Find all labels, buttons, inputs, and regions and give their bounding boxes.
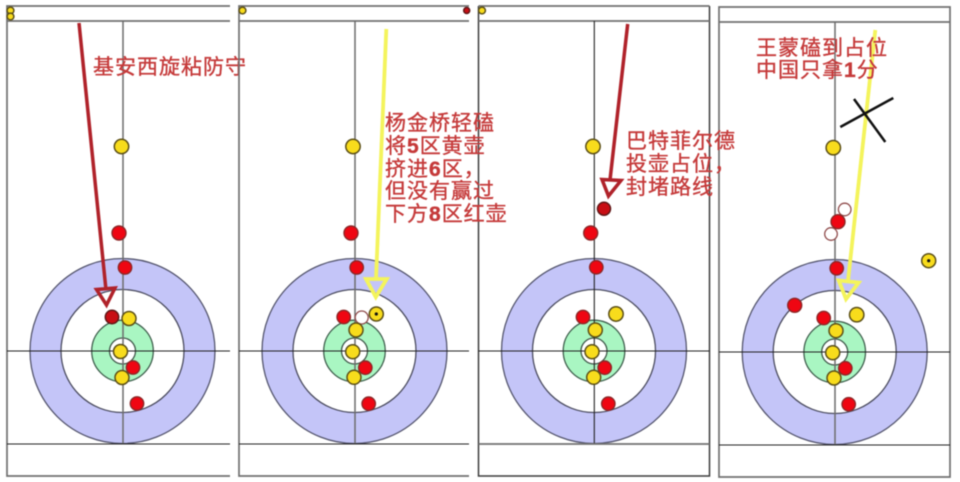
text: shot 3 caption: 封堵路线 [626,176,714,199]
text: shot 3 caption [626,130,736,199]
sheet frame [719,7,950,477]
panel: shot 2 [239,6,470,476]
text: shot 4 caption: 王蒙磕到占位 [756,37,888,60]
centre line [122,21,124,444]
text: shot 1 caption: 基安西旋粘防守 [93,56,247,79]
top rail and hog line [478,6,710,21]
stones [7,7,144,410]
text: shot 2 caption [385,112,508,226]
sheet frame [239,6,469,476]
centre line [354,21,356,444]
text: shot 2 caption: 将5区黄壶 [385,135,486,158]
text: shot 2 caption: 但没有赢过 [385,180,495,203]
text: shot 3 caption: 巴特菲尔德 [626,130,736,153]
panel: shot 4 [719,7,950,477]
stones [479,7,623,410]
sheet frame [7,6,230,476]
panel: shot 3 [478,6,710,476]
cross lines [719,352,950,445]
arrow: red throw [602,24,628,196]
text: shot 2 caption: 杨金桥轻磕 [385,112,495,135]
tee back line [478,443,710,445]
centre line [834,22,836,445]
cross lines [7,351,230,444]
text: shot 2 caption: 挤进6区， [385,158,486,181]
text: shot 4 caption: 中国只拿1分 [756,58,879,82]
house rings [262,258,447,444]
sheet frame [478,6,710,476]
icon: black cross [840,98,893,142]
house rings [502,258,686,444]
text: shot 4 caption [756,37,888,82]
cross lines [478,350,710,352]
arrow: red throw [79,23,115,305]
cross lines [239,351,469,444]
stones [788,140,936,411]
house rings [30,258,215,444]
centre line [593,21,595,444]
stones [239,7,470,410]
arrow: yellow throw [839,30,875,299]
arrow: yellow throw [366,29,387,297]
panel: shot 1 [7,6,247,476]
text: shot 2 caption: 下方8区红壶 [385,203,508,226]
text: shot 3 caption: 投壶占位， [626,153,736,176]
house rings [742,260,927,444]
